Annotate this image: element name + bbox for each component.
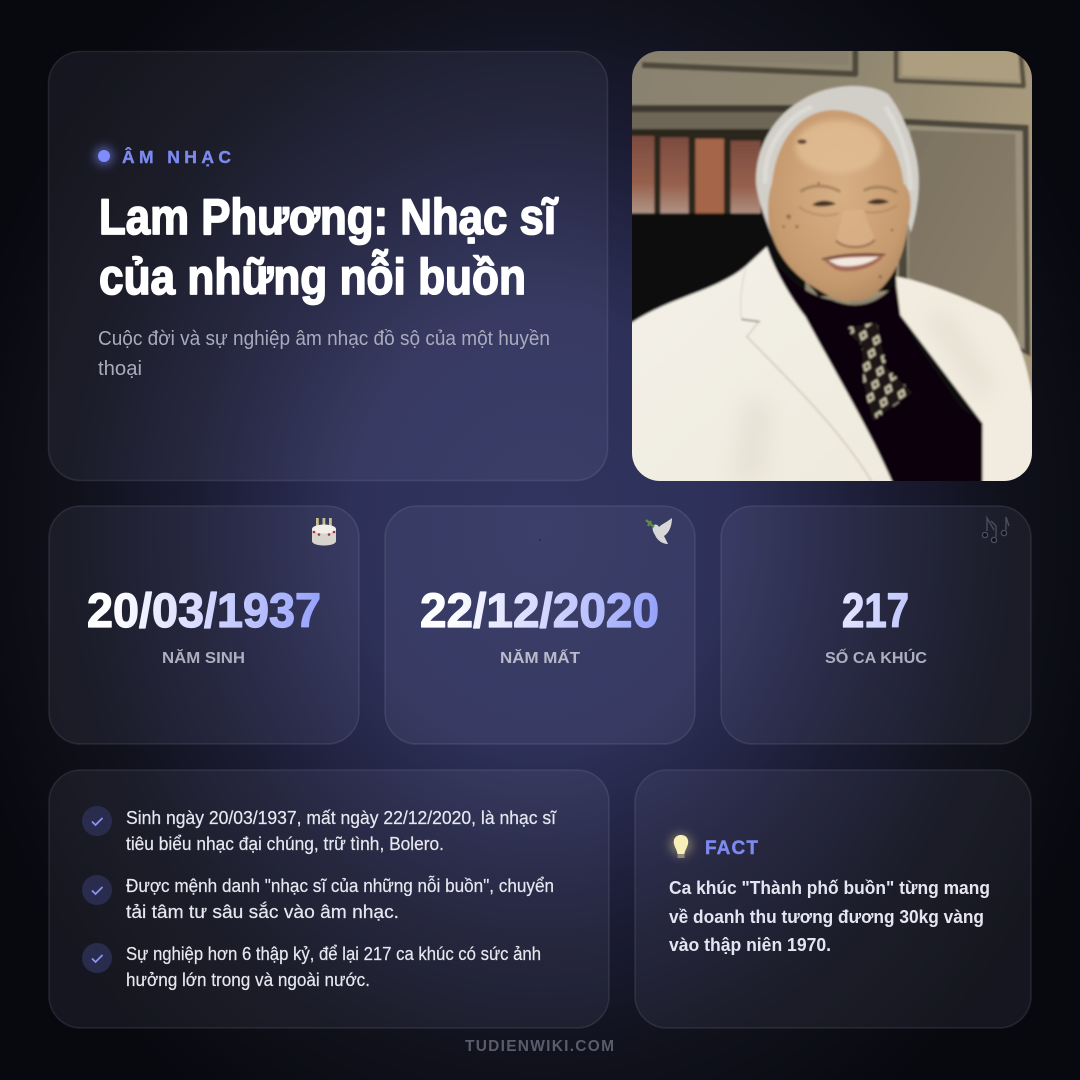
panel: fact [635,770,1031,1028]
fact label: FACT [705,838,758,859]
patterned tie [849,323,913,421]
panel: bullet list [49,770,609,1028]
label: death: NĂM MẤT [500,648,580,667]
fact text: về doanh thu tương đương 30kg vàng [669,906,984,927]
nose [837,210,874,247]
bullet 3 [82,943,541,990]
left jacket [629,247,894,485]
fact text: vào thập niên 1970. [669,934,831,955]
title: Lam Phương: Nhạc sĩ [99,189,559,245]
neck shadow [808,266,898,299]
jacket shadows [741,270,872,482]
stat card: birth [49,506,359,744]
fact text: Ca khúc "Thành phố buồn" từng mang [669,877,990,898]
subtitle: thoại [98,358,142,380]
speck [539,539,541,541]
category tag: ÂM NHẠC [122,146,231,167]
brows and eyes [800,186,840,192]
bullet 2: Được mệnh danh "nhạc sĩ của những nỗi buồn", chuyển [126,875,554,896]
upper wall panels [642,48,1024,86]
bullet 1: Sinh ngày 20/03/1937, mất ngày 22/12/2020, là nhạc sĩ [126,808,557,828]
hair [756,86,919,237]
subtitle: Cuộc đời và sự nghiệp âm nhạc đồ sộ của một huyền [98,328,550,350]
value: death date: 22/12/2020 [420,585,659,638]
stat card: songs [721,506,1031,744]
bullet 3: hưởng lớn trong và ngoài nước. [126,970,370,990]
panel: hero [48,52,608,480]
value: song count: 217 [842,585,909,638]
bullet 2: tải tâm tư sâu sắc vào âm nhạc. [126,901,399,922]
subtitle [98,328,550,380]
icon: music notes [982,517,1009,543]
mantel and bricks [629,105,805,323]
title [99,189,559,305]
label: songs: SỐ CA KHÚC [825,647,927,667]
bullet 2 [82,875,554,922]
wall [632,51,1032,422]
value: birth date: 20/03/1937 [87,585,321,638]
mouth [824,255,884,271]
right door panel [899,118,1030,357]
portrait photo [629,47,1035,485]
icon: dove [646,518,672,544]
black shirt [767,249,983,485]
upper wall tan tint [902,51,1018,78]
bullet 3: Sự nghiệp hơn 6 thập kỷ, để lại 217 ca khúc có sức ảnh [126,944,541,964]
icon: light bulb [670,834,692,858]
bullet 1 [82,806,557,854]
title: của những nỗi buồn [99,249,526,305]
hair strands [765,107,910,190]
face [768,110,911,302]
right jacket [896,277,1035,485]
icon: cake [312,518,336,546]
bullet 1: tiêu biểu nhạc đại chúng, trữ tình, Bolero. [126,834,444,854]
fact text [669,877,990,955]
goatee [850,296,884,308]
footer watermark: TUDIENWIKI.COM [465,1038,614,1055]
label: birth: NĂM SINH [162,648,245,667]
stat card: death [385,506,695,744]
